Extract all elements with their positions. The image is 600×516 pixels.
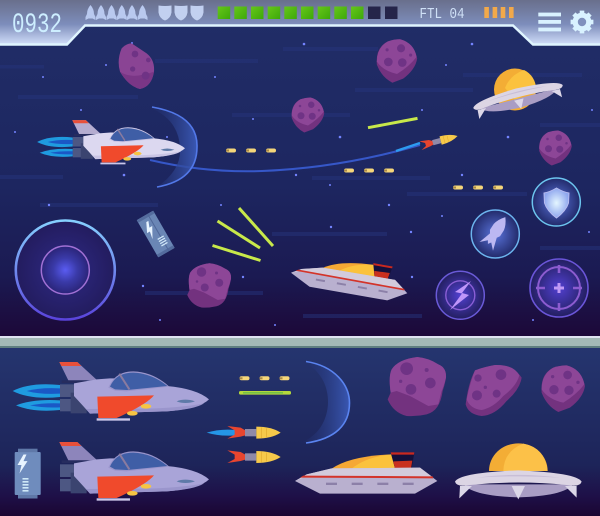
sprite: laser xyxy=(239,391,291,395)
speed boat enemy ship xyxy=(289,249,411,304)
lives rockets xyxy=(86,5,148,20)
shield button xyxy=(532,178,580,226)
sprite: ship with thrusters xyxy=(13,362,209,421)
FTL readout: FTL 04 xyxy=(420,6,464,23)
virtual joystick xyxy=(16,220,115,320)
sprite: battery xyxy=(15,449,41,498)
missile trail xyxy=(150,145,420,171)
asteroid right xyxy=(539,130,572,166)
asteroid middle xyxy=(292,98,324,132)
bullets row 2 xyxy=(344,168,394,172)
flying saucer xyxy=(471,68,566,120)
score counter: 0932 xyxy=(12,10,62,41)
asteroid top left xyxy=(119,43,154,89)
settings gear icon xyxy=(571,11,593,33)
ammo bars xyxy=(484,7,514,18)
bullets row 3 xyxy=(453,186,503,190)
menu icon xyxy=(538,13,561,31)
sprite: large asteroid xyxy=(388,357,446,416)
green laser upper xyxy=(368,118,418,128)
sprite: small asteroid xyxy=(541,365,585,412)
health bar segments xyxy=(218,6,398,19)
asteroid top centre xyxy=(377,39,417,83)
sprite: flying saucer xyxy=(455,443,582,499)
shield counters xyxy=(158,6,204,20)
game scene background xyxy=(0,0,600,337)
background stars xyxy=(14,42,593,326)
sprite: speed boat xyxy=(295,452,437,494)
flying missile xyxy=(396,131,459,151)
energy shield crescent xyxy=(148,107,197,187)
sprite: missile xyxy=(227,450,281,463)
bullets row 1 xyxy=(226,148,276,152)
sprite: bullets xyxy=(240,376,290,380)
background speed streaks xyxy=(0,47,600,318)
missile button xyxy=(471,210,519,258)
asteroid lower centre xyxy=(187,263,231,308)
sprite sheet panel background xyxy=(0,348,600,516)
divider band xyxy=(0,336,600,348)
energy battery pickup xyxy=(137,211,175,257)
energy button xyxy=(436,271,484,319)
top HUD bar xyxy=(0,0,600,44)
sprite: ship idle xyxy=(59,442,209,501)
sprite: shield crescent xyxy=(300,361,350,443)
target crosshair button xyxy=(530,259,588,317)
player ship with thrusters xyxy=(37,120,185,164)
green laser cluster xyxy=(212,208,273,260)
sprite: medium asteroid xyxy=(466,365,522,416)
sprite: missile with flame xyxy=(207,426,281,439)
